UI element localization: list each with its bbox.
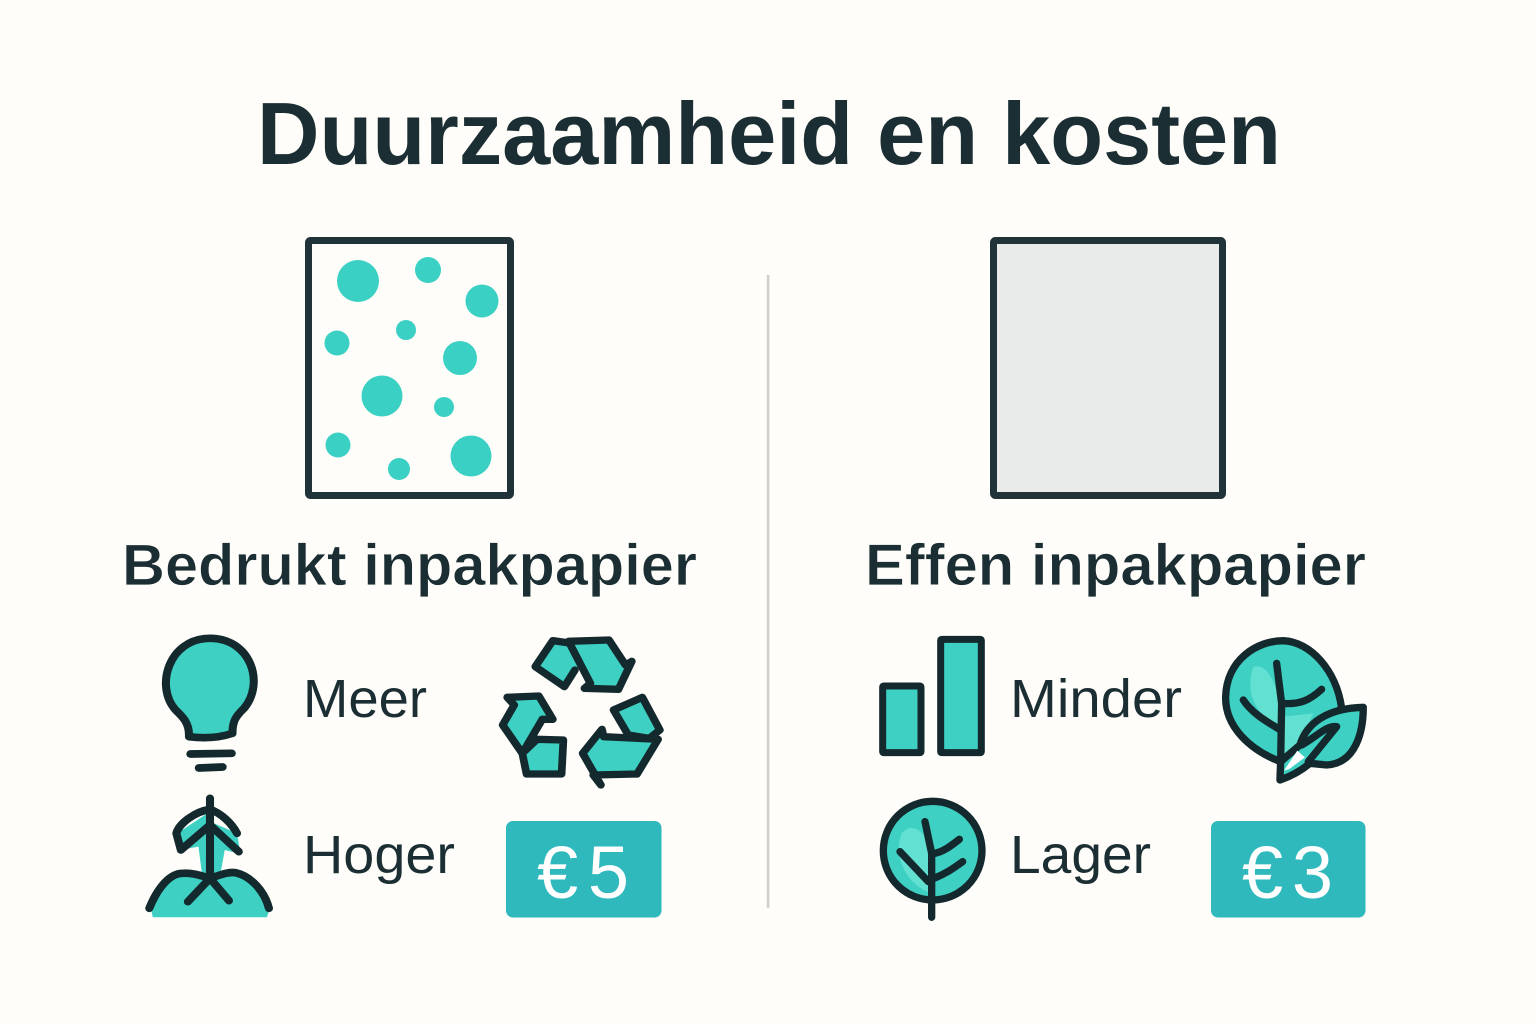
label: hoger: Hoger: [303, 825, 455, 885]
icon: light bulb: [166, 638, 254, 768]
illustration: plain paper: [994, 240, 1222, 496]
panel: effen inpakpapier: [865, 240, 1366, 918]
icon: tree with leaf: [1226, 641, 1363, 780]
price badge: 5 euro: [506, 821, 662, 918]
label: meer: Meer: [303, 669, 427, 729]
icon: bar chart: [883, 639, 981, 753]
price badge: 5 euro: €5: [537, 831, 629, 914]
panel: bedrukt inpakpapier: [122, 240, 697, 918]
title: Duurzaamheid en kosten: [257, 84, 1281, 183]
label: minder: Minder: [1010, 669, 1182, 729]
illustration: printed paper with dots: [308, 240, 510, 496]
heading: bedrukt inpakpapier: Bedrukt inpakpapier: [122, 533, 697, 598]
heading: effen inpakpapier: Effen inpakpapier: [865, 533, 1366, 598]
label: lager: Lager: [1010, 825, 1151, 885]
icon: round tree: [883, 801, 982, 917]
icon: sprout with roots: [149, 798, 270, 917]
price badge: 3 euro: €3: [1242, 831, 1333, 914]
icon: recycling arrows: [503, 640, 660, 785]
price badge: 3 euro: [1211, 821, 1366, 918]
